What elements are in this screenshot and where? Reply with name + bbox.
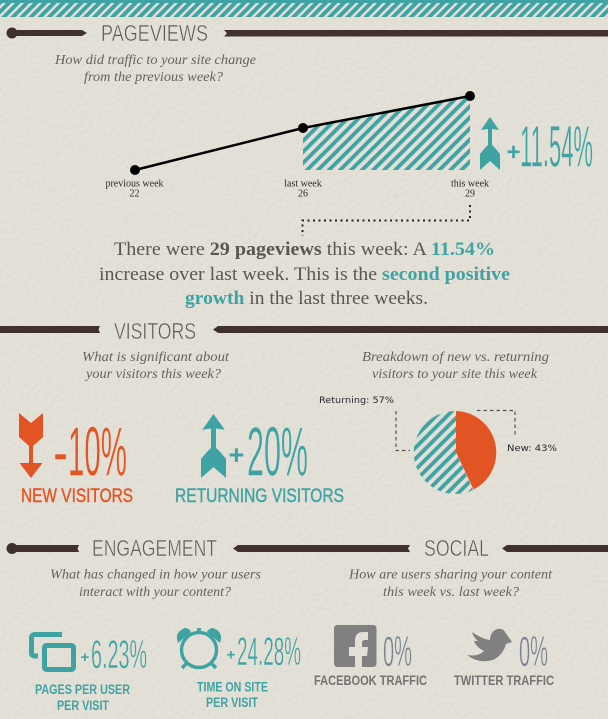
label: twitter traffic: TWITTER TRAFFIC	[454, 673, 554, 688]
stat group: new visitors	[19, 412, 133, 507]
label: returning visitors: RETURNING VISITORS	[175, 485, 344, 507]
summary paragraph: There were 29 pageviews this week: A 11.54%	[114, 239, 495, 260]
question: breakdown	[362, 350, 549, 382]
leader: returning	[396, 411, 410, 450]
stat group: time on site	[177, 628, 301, 710]
question: engagement change: What has changed in how your users	[50, 568, 262, 582]
stat group: pages per user	[32, 633, 147, 713]
stat: time change	[226, 630, 301, 674]
pageviews header ribbon	[6, 28, 608, 38]
engagement header ribbon	[6, 543, 410, 554]
label: returning share: Returning: 57%	[319, 396, 394, 406]
label: time on site: PER VISIT	[206, 695, 259, 710]
icon: up arrow	[201, 414, 226, 478]
question: engagement change: interact with your content?	[79, 585, 231, 600]
question: significant visitors: What is significant about	[82, 350, 230, 365]
question: traffic change	[54, 53, 256, 85]
icon: facebook	[334, 625, 376, 667]
question: breakdown: visitors to your site this week	[372, 367, 538, 382]
icon: up arrow	[480, 117, 500, 170]
line chart: 22	[130, 188, 140, 200]
heading: engagement: ENGAGEMENT	[92, 535, 217, 561]
heading: visitors: VISITORS	[114, 318, 196, 344]
stat group: twitter: 0%	[519, 628, 548, 676]
stat: pageviews change: +	[506, 139, 521, 166]
icon: pages	[32, 634, 74, 670]
line chart: this week	[451, 178, 489, 190]
summary paragraph	[99, 239, 510, 309]
panel: visitors	[0, 318, 608, 507]
panel: engagement: 24.28%	[237, 630, 301, 674]
stat group: returning visitors	[175, 412, 344, 507]
stat: new visitors change	[53, 412, 127, 490]
line chart: previous week	[105, 178, 164, 190]
label: time on site	[197, 680, 268, 710]
label: new share: New: 43%	[507, 444, 557, 454]
label: new visitors: NEW VISITORS	[21, 485, 133, 507]
stat: returning visitors change	[228, 412, 308, 490]
panel: social	[314, 535, 608, 688]
question: significant visitors	[82, 350, 230, 382]
stat: pages change: +	[80, 649, 90, 666]
panel: visitors: 10%	[68, 412, 127, 490]
social header ribbon	[502, 545, 608, 552]
line chart: 26	[298, 188, 308, 200]
stat group: facebook: 0%	[383, 628, 412, 676]
question: engagement change	[50, 568, 262, 600]
top striped band	[0, 0, 608, 17]
stat: returning visitors change: +	[228, 440, 244, 470]
line chart: 29	[465, 188, 475, 200]
stat group: twitter	[454, 628, 554, 688]
label: pages per user	[35, 682, 130, 713]
icon: down arrow	[19, 413, 43, 478]
icon: twitter bird	[467, 629, 512, 661]
icon: alarm clock	[177, 628, 221, 668]
panel: pageviews	[6, 20, 608, 309]
question: sharing: this week vs. last week?	[383, 585, 519, 600]
stat: time change: +	[226, 646, 236, 664]
pie chart	[319, 396, 557, 494]
heading: social: SOCIAL	[424, 535, 489, 561]
stat group: facebook	[314, 625, 427, 688]
line chart	[105, 91, 489, 200]
label: facebook traffic: FACEBOOK TRAFFIC	[314, 673, 427, 688]
label: time on site: TIME ON SITE	[197, 680, 268, 694]
label: pages per user: PAGES PER USER	[35, 682, 130, 697]
question: sharing	[348, 568, 553, 600]
stat group: returning visitors: 20%	[247, 412, 308, 490]
visitors header ribbon	[0, 326, 608, 333]
stat: new visitors change: -	[53, 412, 68, 490]
question: traffic change: from the previous week?	[84, 70, 223, 85]
panel: engagement	[6, 535, 410, 713]
question: breakdown: Breakdown of new vs. returning	[362, 350, 549, 365]
line chart: last week	[284, 178, 322, 190]
summary paragraph: growth in the last three weeks.	[185, 288, 428, 309]
panel: engagement: 6.23%	[91, 633, 147, 677]
summary paragraph: increase over last week. This is the second positive	[99, 264, 510, 285]
stat: pages change	[80, 633, 147, 677]
label: pages per user: PER VISIT	[57, 698, 110, 713]
question: traffic change: How did traffic to your site change	[54, 53, 256, 68]
question: sharing: How are users sharing your content	[348, 568, 553, 582]
question: significant visitors: your visitors this week?	[84, 367, 221, 382]
heading: pageviews: PAGEVIEWS	[101, 20, 208, 46]
leader: new	[477, 410, 515, 437]
dotted connector	[302, 205, 470, 236]
